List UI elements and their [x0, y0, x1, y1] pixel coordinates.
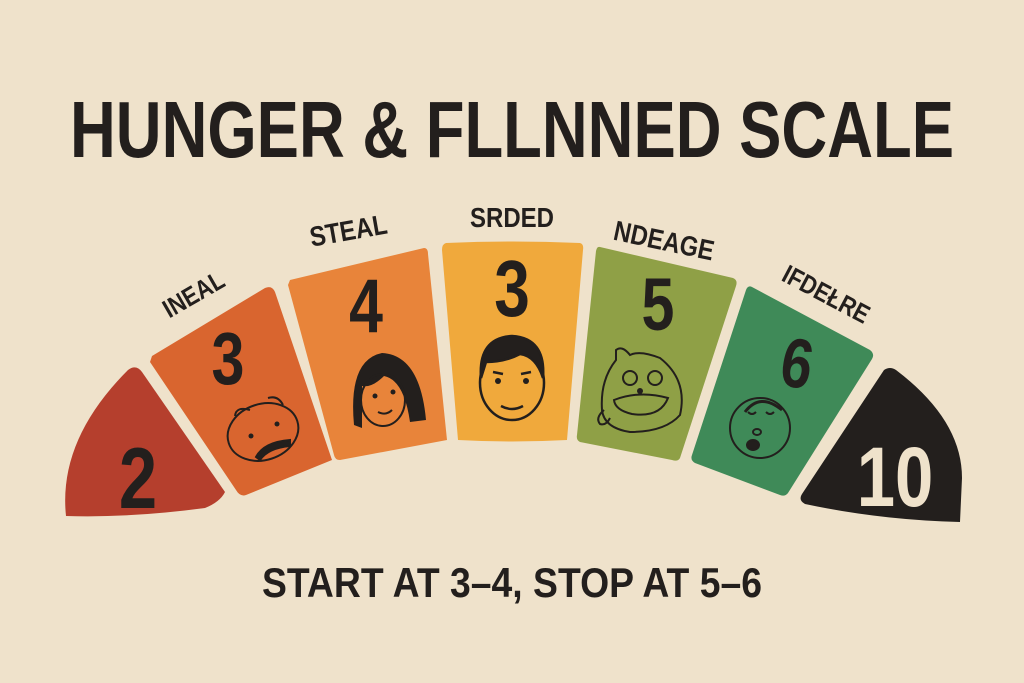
segment: 3 orange: 3	[212, 318, 244, 401]
segment: 4 orange	[288, 248, 447, 460]
segment: 3 yellow: 3	[494, 244, 530, 334]
segment: 3 orange	[150, 287, 332, 495]
segment: 10 black	[801, 368, 962, 525]
segment: 6 green: 6	[775, 323, 819, 405]
label: IFDEZRE: IFDEŁRE	[777, 260, 874, 330]
label: SRDED: SRDED	[470, 202, 554, 233]
segment: 5 green	[577, 247, 737, 461]
segment: 6 green	[691, 286, 873, 496]
segment: 5 green: 5	[642, 264, 674, 347]
segment: 4 orange: 4	[349, 264, 383, 349]
icon: glasses face	[598, 348, 682, 432]
label: STEAL: STEAL	[307, 208, 390, 253]
segment: 3 yellow	[442, 242, 583, 442]
segment: 2 red: 2	[119, 431, 157, 527]
label: INEAL: INEAL	[158, 266, 230, 324]
icon: upset face	[220, 394, 306, 470]
segment: 2 red	[65, 367, 225, 527]
icon: sleepy face	[730, 398, 790, 458]
icon: woman face	[353, 353, 426, 428]
segment: 10 black: 10	[857, 431, 933, 525]
icon: smiling man	[480, 336, 544, 420]
bottom caption: START AT 3–4, STOP AT 5–6	[262, 559, 762, 606]
label: NDEAGE: NDEAGE	[611, 214, 717, 267]
